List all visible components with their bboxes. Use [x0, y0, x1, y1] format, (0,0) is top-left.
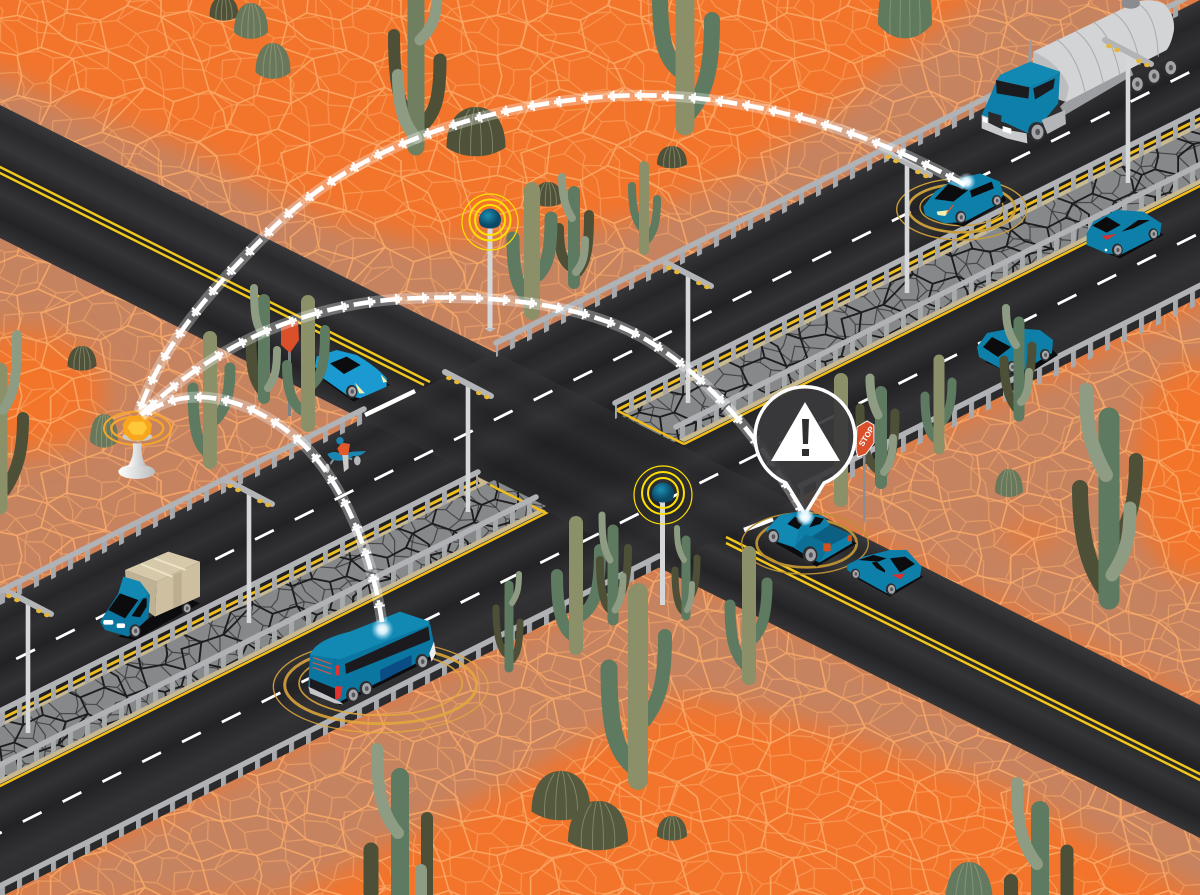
cross road yellow centre lines: [0, 164, 1200, 782]
street light 1: [5, 590, 51, 733]
cactus top centre: [394, 0, 440, 147]
cactus by stop sign: [860, 378, 895, 483]
pickup truck with signal rings: [742, 507, 868, 574]
cactus by bottom fence: [496, 574, 520, 668]
blue car on lower carriageway right: [1087, 210, 1163, 258]
motorcycle and rider: [323, 437, 366, 475]
barrel 5: [657, 146, 687, 168]
cactus near intersection: [600, 515, 628, 620]
barrel 7: [68, 346, 96, 371]
cactus near beacon: [193, 338, 230, 462]
signal arc: bus to gem: [141, 397, 382, 622]
cactus top right: [660, 0, 712, 126]
small cactus by beacon: [675, 528, 697, 616]
intersection surface: [362, 352, 792, 568]
barrel 6: [533, 182, 563, 207]
beacon pole at intersection: [660, 500, 665, 605]
sports car: [315, 350, 390, 402]
barrel 9: [995, 469, 1023, 497]
cactus on lower carriageway: [557, 523, 600, 648]
street light 2: [226, 480, 272, 623]
cactus bottom left: [371, 749, 427, 895]
barrel 12: [657, 816, 687, 841]
street light 4: [665, 262, 711, 403]
cactus bottom right: [1011, 783, 1067, 895]
barrel 11: [568, 801, 628, 850]
blue car behind cactus: [977, 328, 1058, 378]
cactus below pickup: [730, 553, 767, 678]
exclamation mark: [802, 419, 809, 456]
tall cactus left road: [287, 302, 325, 425]
central gem unit on pedestal: [104, 412, 171, 479]
barrel 10: [532, 771, 590, 820]
street light 5: [884, 151, 930, 293]
signal arc: car to gem: [139, 95, 965, 412]
barrel 3: [256, 43, 290, 79]
big foreground cactus: [609, 593, 665, 780]
cactus over blue car: [1004, 308, 1032, 416]
barrel 4: [446, 107, 506, 156]
warning bubble: [755, 387, 855, 514]
blue car behind pickup: [847, 550, 923, 597]
signal arc: gem to pickup: [141, 298, 805, 515]
roadside beacon lower: [634, 466, 692, 524]
cactus pair middle: [513, 177, 589, 312]
left road cactus: [251, 288, 277, 398]
small cactus: [632, 166, 657, 250]
roadside beacon upper: [462, 194, 518, 332]
street light 6: [1105, 40, 1151, 183]
barrel 2: [234, 3, 268, 39]
pickup signal glow: [796, 508, 814, 526]
cactus by right fence: [925, 360, 952, 449]
tanker truck: [982, 0, 1178, 143]
box truck: [100, 552, 200, 640]
barrel 8: [90, 414, 118, 448]
large cactus right: [1080, 390, 1136, 599]
barrel 1: [210, 0, 238, 21]
sign back on left road: [281, 320, 299, 416]
cactus left edge: [0, 335, 23, 507]
stop bars: [365, 391, 773, 530]
street lights: [5, 40, 1151, 733]
warning triangle: [771, 402, 840, 461]
median strips: [0, 116, 1200, 788]
stop sign: STOP: [857, 424, 877, 448]
barrel 14: [878, 0, 932, 38]
barrel 13: [945, 862, 993, 895]
connected car with signal rings: [897, 172, 1027, 240]
cactus behind warning: [834, 380, 848, 500]
bus with signal rings: [273, 612, 488, 733]
stop sign: [856, 421, 877, 522]
street light 3: [445, 372, 491, 512]
barrel cacti: [68, 0, 1023, 895]
